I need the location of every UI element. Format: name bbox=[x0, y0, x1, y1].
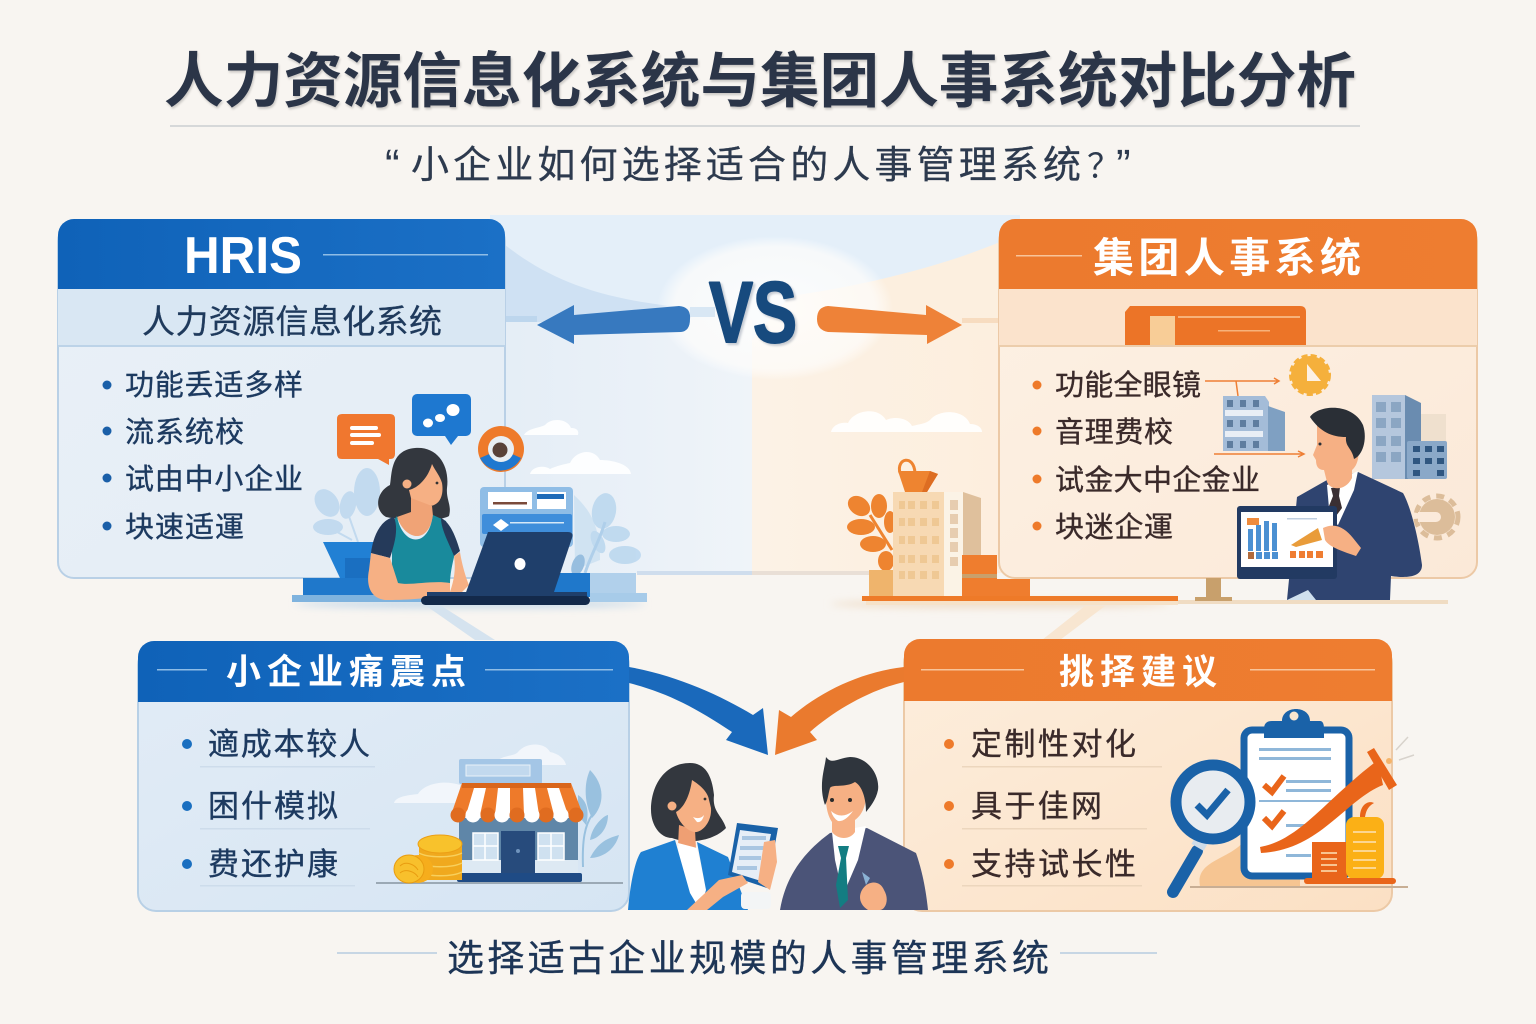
shirt and tie bbox=[1327, 471, 1358, 525]
arrow: advice to center bbox=[775, 667, 904, 755]
sign bbox=[459, 759, 542, 784]
feature list: HRIS bbox=[102, 369, 303, 544]
dashboard card bbox=[480, 487, 573, 547]
list: advice: 具于佳网 bbox=[971, 789, 1102, 824]
list: small business: 费还护康 bbox=[208, 847, 338, 882]
walls bbox=[459, 818, 578, 873]
feature list: group: 块迷企運 bbox=[1055, 511, 1173, 544]
plant left bbox=[309, 468, 380, 542]
connector: HRIS panel to bottom bbox=[425, 605, 495, 640]
arrow: VS to HRIS bbox=[537, 305, 690, 344]
laptop bbox=[465, 532, 572, 595]
woman cuff bbox=[741, 892, 771, 909]
panel subheader: orange banner bbox=[999, 289, 1477, 347]
list: small business: 困什模拟 bbox=[208, 789, 338, 824]
feature list: group: 功能全眼镜 bbox=[1055, 369, 1201, 402]
illustration: woman with laptop bbox=[292, 394, 647, 608]
panel header: advice: 挑择建议 bbox=[1059, 653, 1217, 692]
subtitle: ？ bbox=[1087, 148, 1121, 186]
plant bbox=[844, 492, 896, 571]
illustration: buildings and orange plant in band bbox=[830, 460, 1448, 608]
panel: selection advice bbox=[904, 639, 1392, 911]
gear bbox=[1416, 496, 1458, 538]
subtitle: 小企业如何选择适合的人事管理系统 bbox=[411, 145, 1081, 187]
man suit bbox=[780, 828, 928, 910]
clock badge bbox=[1291, 356, 1329, 394]
panel header: advice bbox=[904, 639, 1392, 701]
bars bbox=[1312, 842, 1347, 880]
building right bbox=[1372, 395, 1447, 479]
woman hair bbox=[651, 763, 726, 841]
feature list: group: 试金大中企金业 bbox=[1055, 464, 1260, 497]
footer line: 选择适古企业规模的人事管理系统 bbox=[447, 938, 1049, 979]
panel header: small business: 小企业痛震点 bbox=[226, 653, 466, 692]
subtitle: “ bbox=[385, 141, 400, 190]
feature list: group: 音理费校 bbox=[1055, 416, 1173, 449]
feature list: HRIS: 试由中小企业 bbox=[125, 463, 303, 496]
panel subheader: HRIS full name bbox=[58, 289, 505, 347]
clouds bbox=[394, 783, 460, 803]
clouds bbox=[524, 420, 578, 435]
panel: group HR system bbox=[999, 219, 1477, 578]
list: advice: 定制性对化 bbox=[971, 727, 1136, 762]
man hand with pen bbox=[860, 882, 887, 910]
man head bbox=[826, 770, 866, 838]
panel header: group HR bbox=[999, 219, 1477, 289]
woman neck bbox=[678, 825, 696, 848]
coins bbox=[394, 835, 462, 883]
desk blue base bbox=[323, 542, 380, 578]
panel subheader: HRIS full name: 人力资源信息化系统 bbox=[142, 303, 442, 340]
clouds in band bbox=[831, 411, 982, 432]
woman hair bbox=[378, 448, 450, 520]
leaves bbox=[578, 770, 619, 867]
feature list: group bbox=[1032, 369, 1260, 544]
subtitle: ” bbox=[1116, 141, 1131, 190]
woman face bbox=[409, 464, 442, 506]
tower bbox=[893, 492, 944, 596]
illustration: businessman with tablet bbox=[1195, 356, 1458, 601]
arrow: small business to center bbox=[629, 667, 768, 755]
panel header: group HR: 集团人事系统 bbox=[1093, 235, 1361, 281]
illustration: clipboard and magnifier bbox=[1173, 709, 1414, 892]
monitor stand bbox=[1206, 578, 1221, 598]
feature list: HRIS: 块速适運 bbox=[125, 511, 244, 544]
panel header: small business bbox=[138, 641, 629, 702]
building left bbox=[1223, 396, 1285, 451]
woman face bbox=[676, 780, 711, 832]
orange speech bubble bbox=[337, 414, 395, 465]
blue speech bubble bbox=[412, 394, 471, 445]
plant right bbox=[569, 491, 641, 577]
woman top bbox=[388, 515, 455, 592]
panel header: HRIS bbox=[58, 219, 505, 289]
arrow: VS to group bbox=[817, 305, 962, 344]
woman shirt bbox=[678, 843, 707, 910]
list: advice bbox=[944, 727, 1162, 886]
connector: group panel to bottom bbox=[1042, 606, 1105, 640]
list: advice: 支持试长性 bbox=[971, 847, 1136, 882]
woman jacket bbox=[628, 840, 748, 910]
man suit bbox=[1287, 472, 1422, 600]
man hand bbox=[1323, 526, 1361, 556]
awning bbox=[451, 783, 583, 815]
feature list: HRIS: 功能丢适多样 bbox=[125, 369, 303, 402]
title: 人力资源信息化系统与集团人事系统对比分析 bbox=[164, 48, 1356, 115]
VS label: VS bbox=[709, 265, 797, 361]
woman arms bbox=[368, 553, 450, 600]
panel: small business recommendation bbox=[138, 641, 629, 911]
woman hands bbox=[758, 840, 777, 890]
central background band behind VS bbox=[490, 215, 1020, 575]
donut chart icon bbox=[478, 426, 524, 472]
woman neck bbox=[397, 498, 433, 536]
man head bbox=[1313, 420, 1359, 488]
list: small business: 適成本较人 bbox=[208, 727, 370, 762]
illustration: shop and coins bbox=[376, 744, 623, 884]
tablet bbox=[728, 823, 778, 888]
panel: HRIS bbox=[58, 219, 505, 578]
connector lines bbox=[1205, 378, 1304, 457]
list: small business bbox=[182, 727, 375, 886]
feature list: HRIS: 流系统校 bbox=[125, 416, 244, 449]
trend arrow bbox=[1260, 760, 1383, 853]
magnifier bbox=[1173, 846, 1193, 890]
panel header: HRIS: HRIS bbox=[184, 227, 302, 285]
tablet with chart bbox=[1237, 506, 1337, 579]
illustration: two people discussing bbox=[628, 757, 928, 910]
bag on roof bbox=[899, 460, 915, 473]
